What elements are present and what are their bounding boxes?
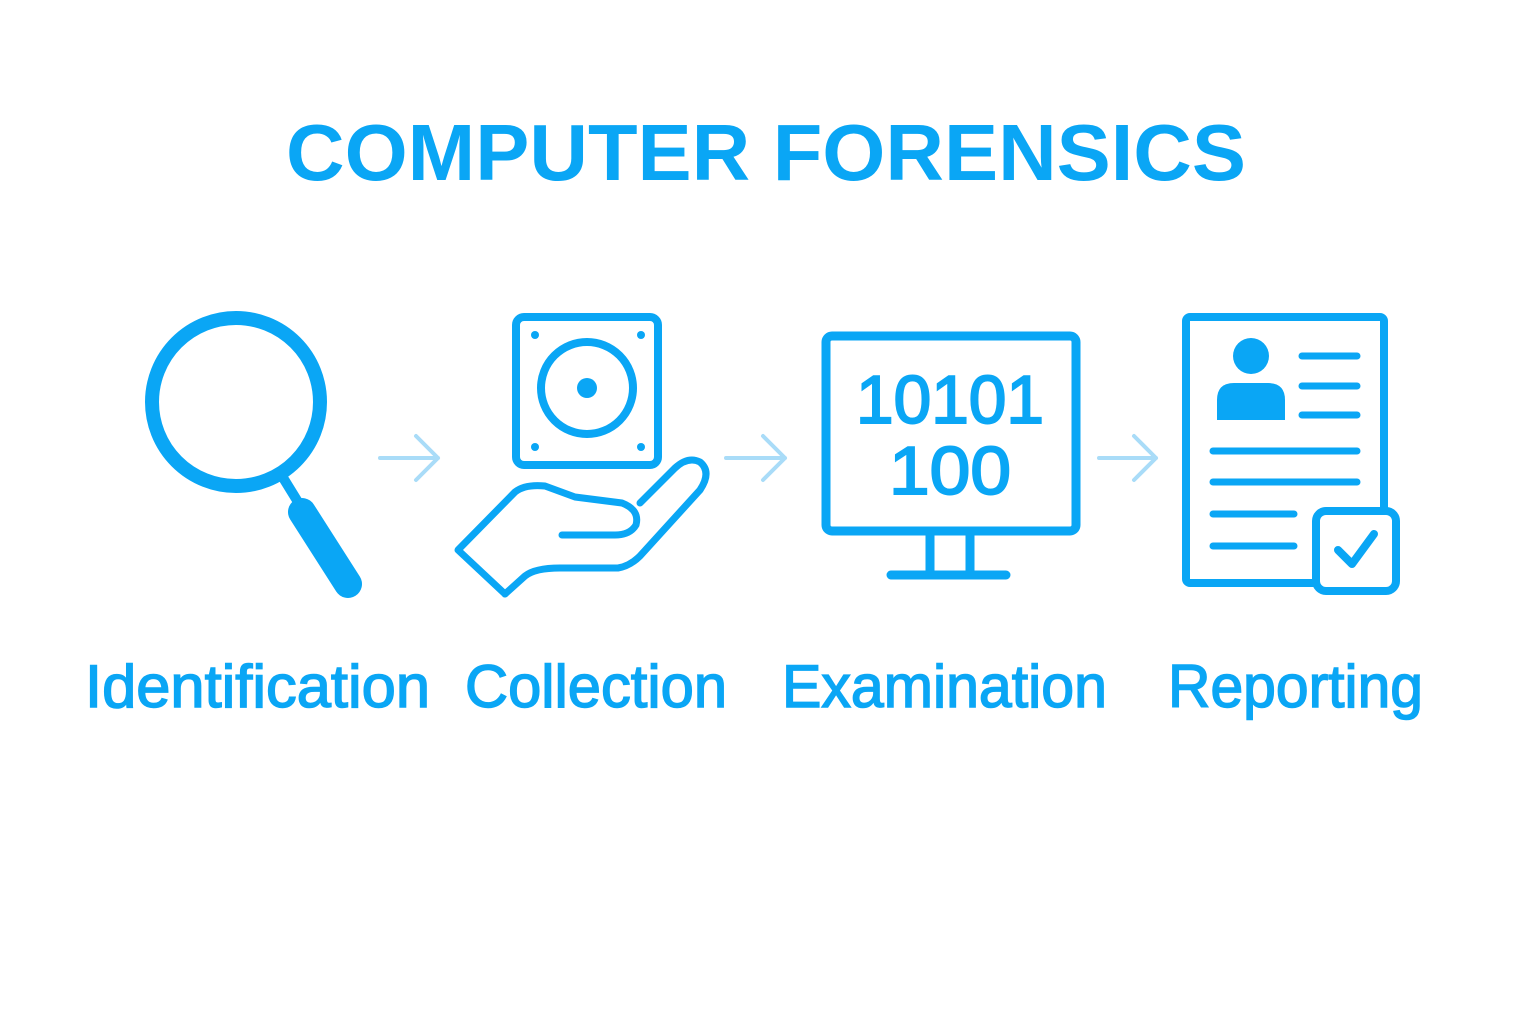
arrow 3 — [1099, 436, 1156, 480]
arrow 2 — [726, 436, 785, 480]
label: Examination: Examination — [782, 653, 1107, 720]
icon: report document — [1186, 317, 1396, 591]
icon: monitor with binary — [826, 336, 1076, 575]
title: COMPUTER FORENSICS — [286, 108, 1246, 197]
icon: monitor with binary: 10101 — [856, 362, 1044, 438]
label: Collection: Collection — [465, 653, 727, 720]
icon: magnifying glass — [152, 318, 348, 584]
icon: hard drive in hand — [458, 317, 706, 594]
label: Reporting: Reporting — [1168, 653, 1423, 720]
arrow 1 — [380, 436, 438, 480]
label: Identification: Identification — [85, 653, 430, 720]
icon: monitor with binary: 100 — [889, 433, 1011, 509]
